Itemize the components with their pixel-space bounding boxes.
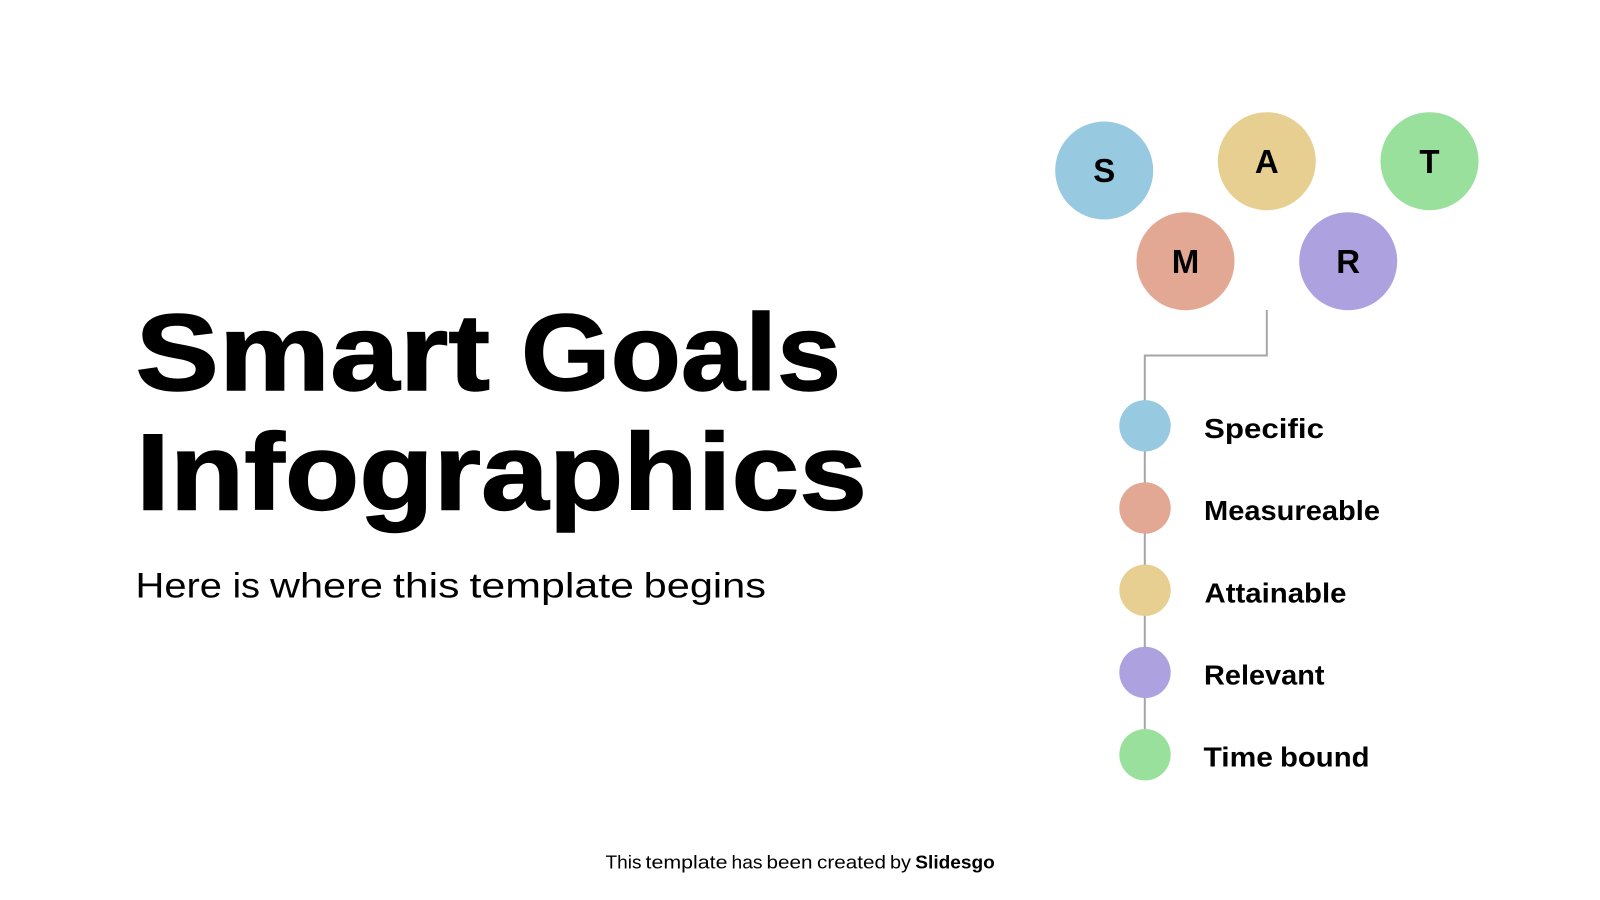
footer credit: Slidesgo bbox=[915, 852, 995, 872]
item: Relevant: Relevant bbox=[1204, 660, 1324, 690]
item: Time bound: bound bbox=[1280, 742, 1370, 773]
subtitle: this bbox=[393, 566, 460, 606]
subtitle: template bbox=[470, 566, 634, 606]
circle: S: S bbox=[1093, 152, 1115, 189]
title bbox=[136, 292, 867, 534]
item: Relevant bbox=[1119, 647, 1324, 698]
footer credit: created bbox=[817, 852, 886, 872]
circle: M bbox=[1136, 212, 1234, 310]
item: Measureable: Measureable bbox=[1204, 495, 1380, 526]
item: Attainable: Attainable bbox=[1204, 577, 1346, 608]
item: Measureable bbox=[1119, 482, 1380, 534]
item: Time bound bbox=[1119, 729, 1370, 780]
footer credit bbox=[606, 852, 995, 872]
circle: R bbox=[1299, 212, 1397, 310]
subtitle: is bbox=[233, 566, 260, 606]
circle: A bbox=[1218, 112, 1316, 210]
subtitle: Here bbox=[136, 566, 222, 606]
item: Specific: Specific bbox=[1204, 413, 1324, 444]
footer credit: This bbox=[606, 852, 642, 872]
connector line bbox=[1145, 310, 1267, 755]
footer credit: been bbox=[766, 852, 812, 872]
circle: T: T bbox=[1419, 143, 1440, 180]
SMART list bbox=[1119, 400, 1380, 780]
subtitle: begins bbox=[644, 566, 766, 606]
footer credit: template bbox=[646, 852, 728, 872]
circle: M: M bbox=[1172, 243, 1199, 280]
title: Goals bbox=[521, 292, 841, 414]
title: Smart bbox=[136, 292, 490, 414]
footer credit: has bbox=[732, 852, 762, 872]
item: Specific bbox=[1119, 400, 1324, 451]
circle: S bbox=[1055, 122, 1153, 220]
circle: R: R bbox=[1336, 243, 1360, 280]
SMART letter circles bbox=[1055, 112, 1478, 310]
circle: A: A bbox=[1255, 143, 1279, 180]
circle: T bbox=[1380, 112, 1478, 210]
item: Attainable bbox=[1119, 564, 1346, 616]
subtitle: where bbox=[269, 566, 383, 606]
subtitle bbox=[136, 566, 766, 606]
title: Infographics bbox=[136, 412, 867, 534]
item: Time bound: Time bbox=[1204, 742, 1273, 773]
footer credit: by bbox=[890, 852, 911, 872]
